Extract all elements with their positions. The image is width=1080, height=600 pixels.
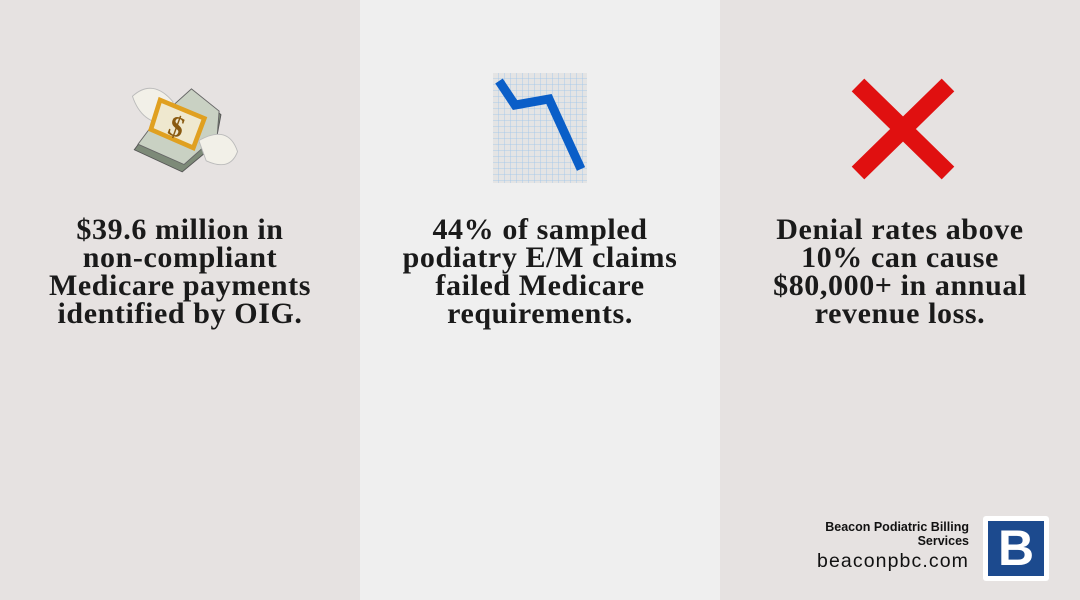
icon: chart decreasing — [493, 73, 587, 183]
text: stat 2: failed Medicare — [435, 269, 645, 302]
website: beaconpbc.com — [817, 550, 969, 572]
panel: left — [0, 0, 360, 600]
brand block — [817, 516, 1049, 581]
text: stat 1: Medicare payments — [49, 269, 311, 302]
icon: red X — [852, 78, 954, 180]
icon: money with wings — [132, 88, 238, 172]
text: stat 3 — [773, 213, 1027, 330]
text: stat 3: $80,000+ in annual — [773, 269, 1027, 302]
logo: B — [998, 520, 1034, 576]
text: stat 2: 44% of sampled — [432, 213, 648, 246]
text: stat 3: 10% can cause — [801, 241, 999, 274]
text: stat 1 — [49, 213, 311, 330]
text: stat 1: $39.6 million in — [76, 213, 284, 246]
text: stat 1: non-compliant — [83, 241, 277, 274]
text: stat 2: podiatry E/M claims — [403, 241, 677, 274]
text: stat 3: revenue loss. — [815, 297, 985, 330]
text: stat 2 — [403, 213, 677, 330]
text: stat 3: Denial rates above — [776, 213, 1024, 246]
panel: right — [720, 0, 1080, 600]
panel: middle — [360, 0, 720, 600]
text: stat 2: requirements. — [447, 297, 633, 330]
text: stat 1: identified by OIG. — [58, 297, 302, 330]
brand name: Beacon Podiatric Billing Services — [825, 520, 969, 548]
icon: money with wings: $ — [164, 110, 189, 145]
logo — [983, 516, 1049, 581]
